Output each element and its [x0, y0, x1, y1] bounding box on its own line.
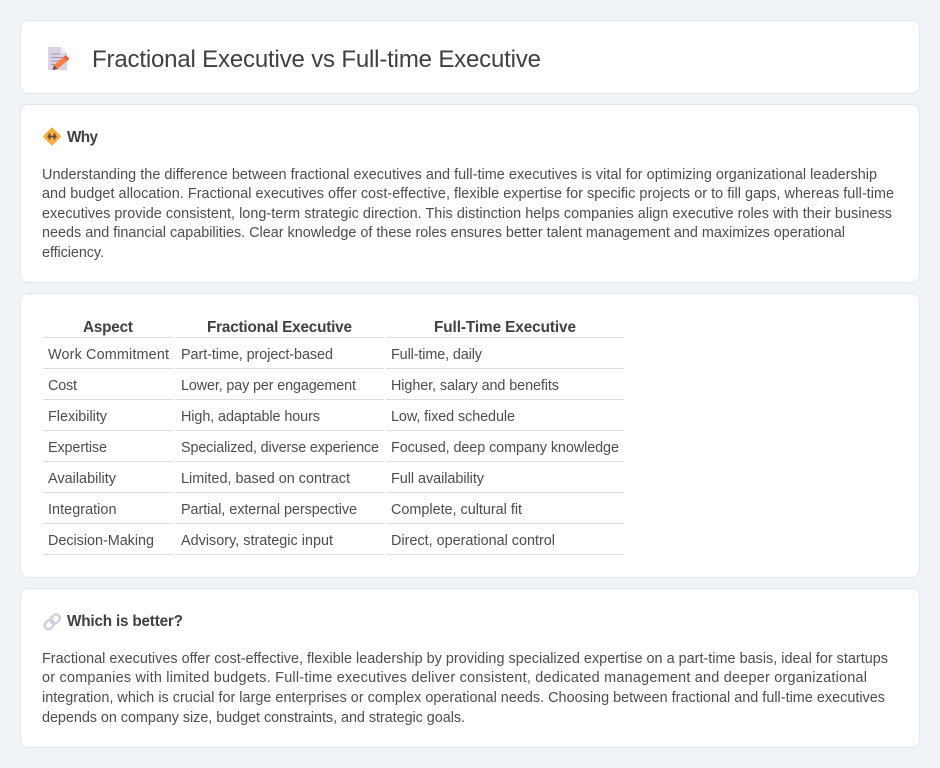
text block: which is better paragraph: [42, 651, 888, 726]
text block: why paragraph: [42, 167, 894, 261]
panel: title header: [20, 20, 920, 94]
text block: why paragraph: Understanding the difference between fractional executives and full-time executives is vital for optimizing organizational leadership: [42, 167, 877, 183]
table row: decision-making: Decision-Making: [48, 533, 154, 549]
table header: [83, 319, 576, 336]
icon: orange diamond sign: [44, 128, 60, 145]
text block: why paragraph: needs and financial capabilities. Clear knowledge of these roles ensures better talent management and maximizes operational: [42, 225, 845, 241]
title: Fractional Executive vs Full-time Executive: [92, 46, 541, 73]
panel: why: [20, 104, 920, 282]
text block: which is better paragraph: or companies with limited budgets. Full-time executives deliver consistent, dedicated management and deeper organizational: [42, 670, 867, 686]
table row: cost: [48, 378, 559, 394]
table row: flexibility: Low, fixed schedule: [391, 409, 515, 425]
table row: cost: Lower, pay per engagement: [181, 378, 356, 394]
table row: decision-making: Direct, operational control: [391, 533, 555, 549]
table header: Full-Time Executive: [434, 319, 576, 336]
table row: work commitment: [48, 347, 483, 363]
text block: why paragraph: efficiency.: [42, 245, 104, 261]
table row: decision-making: Advisory, strategic input: [181, 533, 333, 549]
table row: flexibility: [48, 409, 515, 425]
table row: flexibility: High, adaptable hours: [181, 409, 320, 425]
table row: cost: Higher, salary and benefits: [391, 378, 559, 394]
table row: cost: Cost: [48, 378, 77, 394]
table row: availability: Limited, based on contract: [181, 471, 350, 487]
table row: integration: Partial, external perspective: [181, 502, 357, 518]
table row: decision-making: [48, 533, 555, 549]
table header: Fractional Executive: [207, 319, 352, 336]
table row: expertise: Expertise: [48, 440, 107, 456]
heading: which is better: Which is better?: [67, 613, 183, 630]
heading: why: Why: [67, 129, 98, 146]
panel: comparison table: [20, 294, 920, 578]
panel: which is better: [20, 588, 920, 748]
text block: why paragraph: and budget allocation. Fractional executives offer cost-effective, flexible expertise for specific projects or to fill gaps, whereas full-time: [42, 186, 894, 202]
table row: availability: [48, 471, 485, 487]
text block: which is better paragraph: integration, which is crucial for large enterprises or complex operational needs. Choosing between fractional and full-time executives: [42, 690, 885, 706]
icon: document with pencil: [48, 47, 69, 70]
text block: which is better paragraph: depends on company size, budget constraints, and strategic goals.: [42, 710, 465, 726]
table row: work commitment: Part-time, project-based: [181, 347, 333, 363]
table row: availability: Availability: [48, 471, 117, 487]
icon: link: [43, 613, 61, 631]
table row: expertise: [48, 440, 619, 456]
table row: integration: Integration: [48, 502, 116, 518]
table header: Aspect: [83, 319, 133, 336]
table row: work commitment: Full-time, daily: [391, 347, 483, 363]
table row: expertise: Specialized, diverse experience: [181, 440, 379, 456]
table row: availability: Full availability: [391, 471, 485, 487]
table row: integration: Complete, cultural fit: [391, 502, 522, 518]
table row: flexibility: Flexibility: [48, 409, 108, 425]
table row: expertise: Focused, deep company knowledge: [391, 440, 619, 456]
text block: which is better paragraph: Fractional executives offer cost-effective, flexible leadership by providing specialized expertise on a part-time basis, ideal for startups: [42, 651, 888, 667]
table row: work commitment: Work Commitment: [48, 347, 169, 363]
table row: integration: [48, 502, 522, 518]
text block: why paragraph: executives provide consistent, long-term strategic direction. This distinction helps companies align executive roles with their business: [42, 206, 892, 222]
